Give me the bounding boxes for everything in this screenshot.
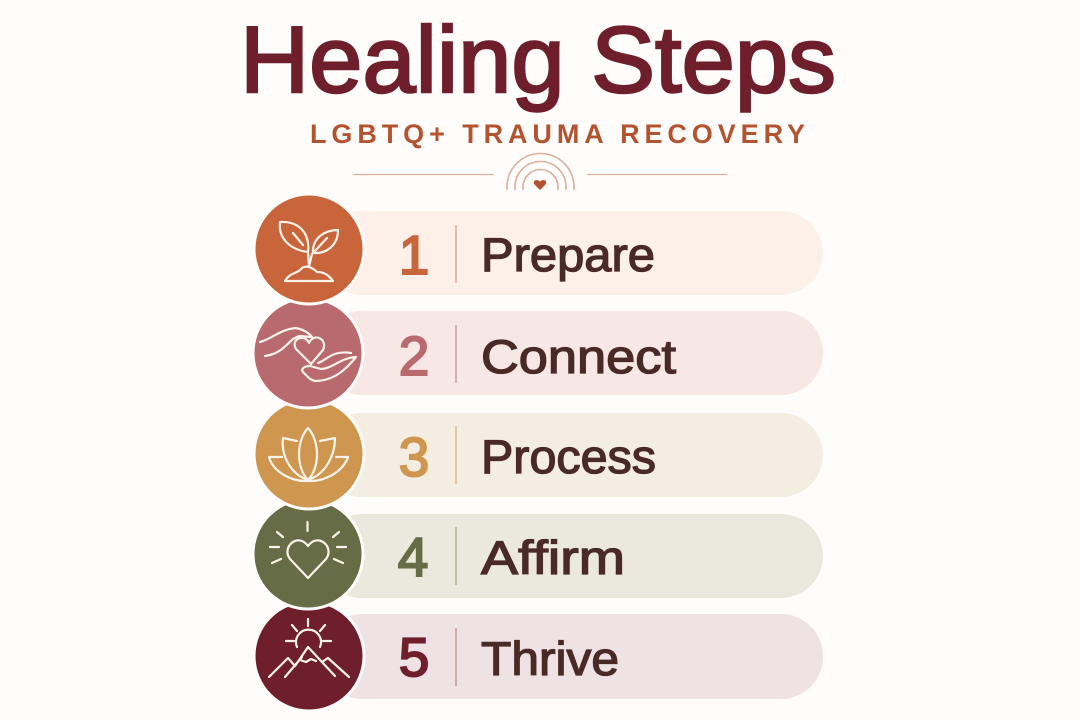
label Thrive: Thrive [481, 632, 619, 685]
icon: mountains and sun [269, 619, 349, 677]
disc 4 with radiant heart icon [253, 499, 363, 609]
icon: small heart [534, 180, 546, 190]
icon: radiant heart [270, 522, 346, 578]
disc 2 with caring hands icon [253, 298, 363, 408]
disc 3 with lotus icon [254, 399, 364, 509]
step 1 pill row [320, 211, 823, 295]
label Affirm: Affirm [481, 531, 625, 584]
label Connect: Connect [481, 330, 676, 383]
disc 1 with sprout icon [254, 194, 364, 304]
disc 5 with mountain sun icon [254, 601, 364, 711]
pill 3 [320, 413, 823, 497]
pill 2 [320, 311, 823, 395]
label Process: Process [481, 430, 656, 483]
number 4: 4 [398, 526, 428, 588]
step 5 pill row [320, 614, 823, 699]
pill 4 [320, 514, 823, 598]
step 3 pill row [320, 413, 823, 497]
label Prepare: Prepare [481, 228, 655, 281]
subtitle: LGBTQ+ TRAUMA RECOVERY [310, 119, 805, 149]
pill 5 [320, 614, 823, 699]
rainbow divider [353, 154, 727, 190]
number 5: 5 [399, 626, 429, 688]
icon: lotus [269, 428, 348, 481]
number 2: 2 [399, 325, 429, 387]
icon: rainbow [507, 154, 574, 190]
pill 1 [320, 211, 823, 295]
icon: caring hands and heart [260, 328, 356, 381]
step 4 pill row [320, 514, 823, 598]
number 1: 1 [399, 224, 429, 286]
icon: sprout [280, 222, 338, 281]
title: Healing Steps [240, 7, 836, 112]
number 3: 3 [399, 426, 429, 488]
step 2 pill row [320, 311, 823, 395]
